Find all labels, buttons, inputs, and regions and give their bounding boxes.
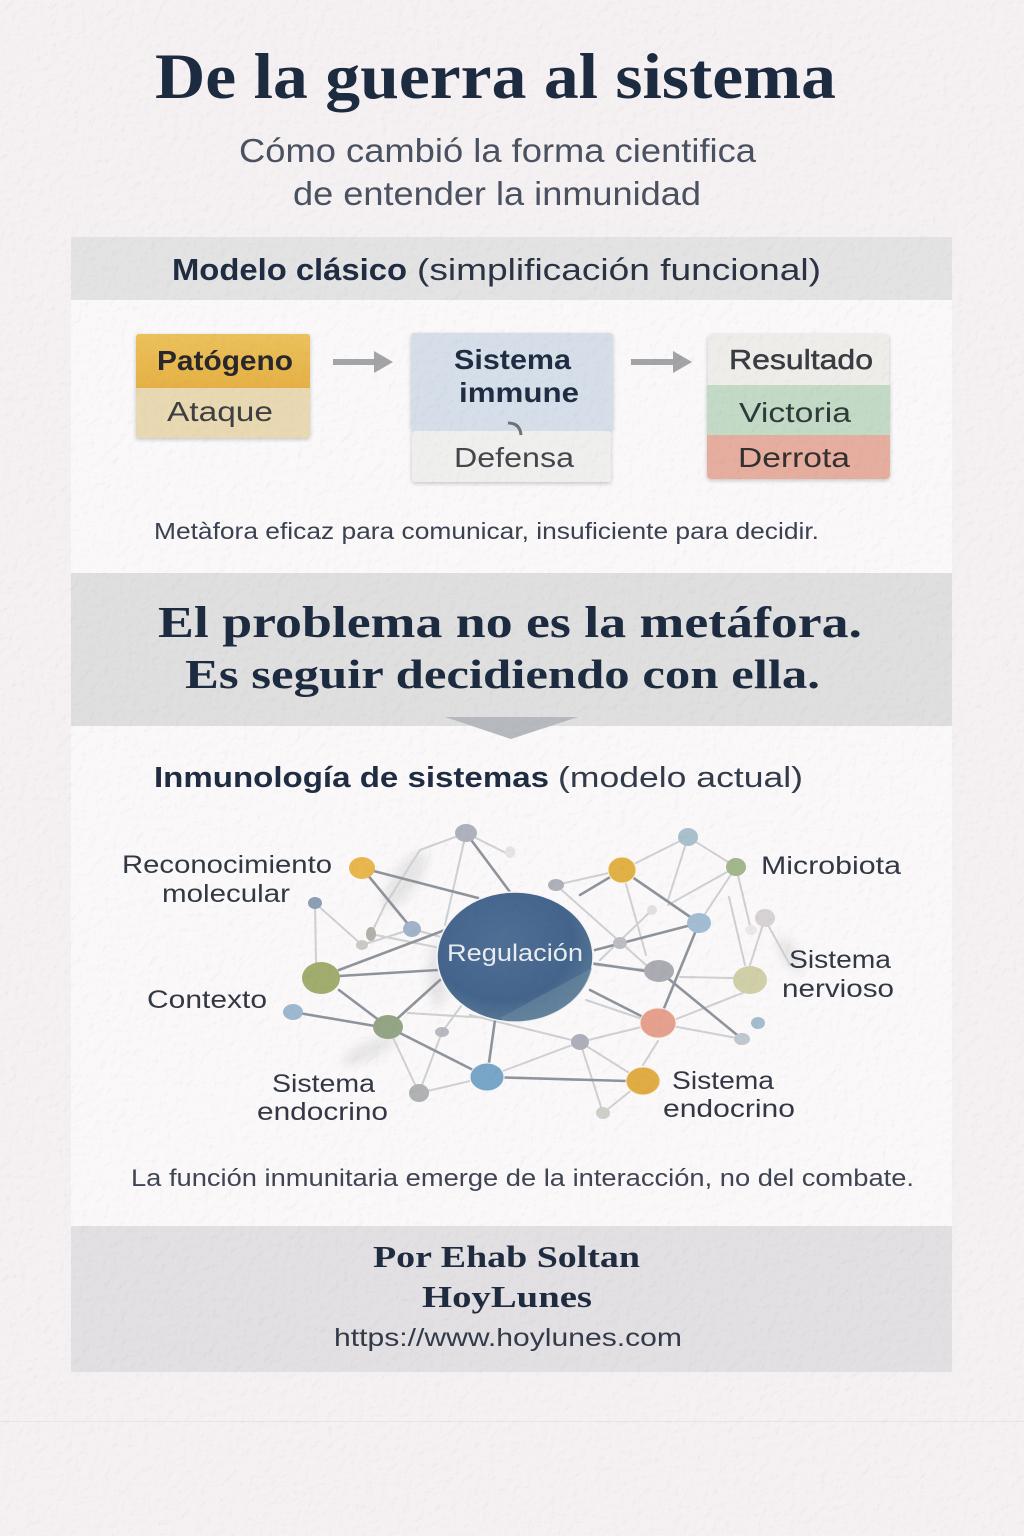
network caption: La función inmunitaria emerge de la interacción, no del combate. [131, 1165, 914, 1192]
label: Sistema nervioso: nervioso [782, 975, 894, 1003]
central node: Regulación: Regulación [447, 940, 583, 967]
label: Sistema endocrino left [257, 1070, 388, 1126]
label: Contexto: Contexto [147, 986, 267, 1014]
footer: credits [71, 1226, 952, 1372]
panel: classic model heading: Modelo clásico [172, 252, 407, 287]
panel: classic model heading [71, 237, 952, 300]
subtitle: de entender la inmunidad [293, 175, 701, 212]
box: Sistema immune / Defensa: Sistema [454, 344, 571, 375]
box: Resultado / Victoria / Derrota: Victoria [739, 397, 852, 428]
watercolour washes [339, 845, 807, 1070]
subtitle [239, 132, 757, 212]
subtitle: Cómo cambió la forma cientifica [239, 132, 757, 169]
systems immunology heading: Inmunología de sistemas [154, 762, 549, 794]
box: Sistema immune / Defensa: Defensa [454, 442, 574, 473]
systems immunology heading: (modelo actual) [558, 762, 803, 794]
label: Sistema endocrino right: endocrino [663, 1095, 795, 1123]
panel: classic model heading: (simplificación funcional) [417, 252, 821, 287]
label: Sistema nervioso [782, 946, 894, 1003]
box: Patógeno / Ataque [136, 334, 310, 438]
network links [293, 833, 790, 1113]
label: Reconocimiento molecular [122, 851, 332, 908]
central node: Regulación [437, 892, 593, 1022]
label: Sistema endocrino right [663, 1067, 795, 1123]
arrow: downward chevron [445, 717, 578, 739]
systems immunology heading [154, 762, 803, 794]
banner: key message [71, 573, 952, 726]
box: Resultado / Victoria / Derrota: Resultado [729, 344, 873, 375]
label: Sistema endocrino right: Sistema [672, 1067, 774, 1095]
network diagram [283, 824, 807, 1119]
main sheet [71, 237, 952, 1372]
arrow: to result [631, 351, 692, 373]
footer: credits: https://www.hoylunes.com [334, 1324, 682, 1352]
banner: key message: El problema no es la metáfora. [158, 598, 862, 647]
network nodes [283, 824, 775, 1119]
label: Sistema nervioso: Sistema [789, 946, 891, 974]
arrow: to immune system [333, 351, 393, 373]
box: Resultado / Victoria / Derrota [707, 334, 890, 479]
label: Reconocimiento molecular: molecular [162, 880, 290, 908]
box: Sistema immune / Defensa [411, 333, 613, 482]
box: Patógeno / Ataque: Patógeno [157, 345, 293, 376]
footer: credits: Por Ehab Soltan [373, 1239, 640, 1274]
label: Sistema endocrino left: endocrino [257, 1098, 388, 1126]
title: De la guerra al sistema [155, 41, 836, 113]
footer: credits: HoyLunes [422, 1279, 592, 1314]
box: Patógeno / Ataque: Ataque [167, 396, 273, 427]
box: Sistema immune / Defensa: immune [459, 377, 579, 408]
banner: key message: Es seguir decidiendo con ella. [185, 651, 820, 697]
box: Resultado / Victoria / Derrota: Derrota [738, 442, 851, 473]
label: Microbiota: Microbiota [761, 852, 901, 880]
classic model note: Metàfora eficaz para comunicar, insuficiente para decidir. [154, 518, 819, 544]
label: Sistema endocrino left: Sistema [272, 1070, 375, 1098]
label: Reconocimiento molecular: Reconocimiento [122, 851, 332, 879]
